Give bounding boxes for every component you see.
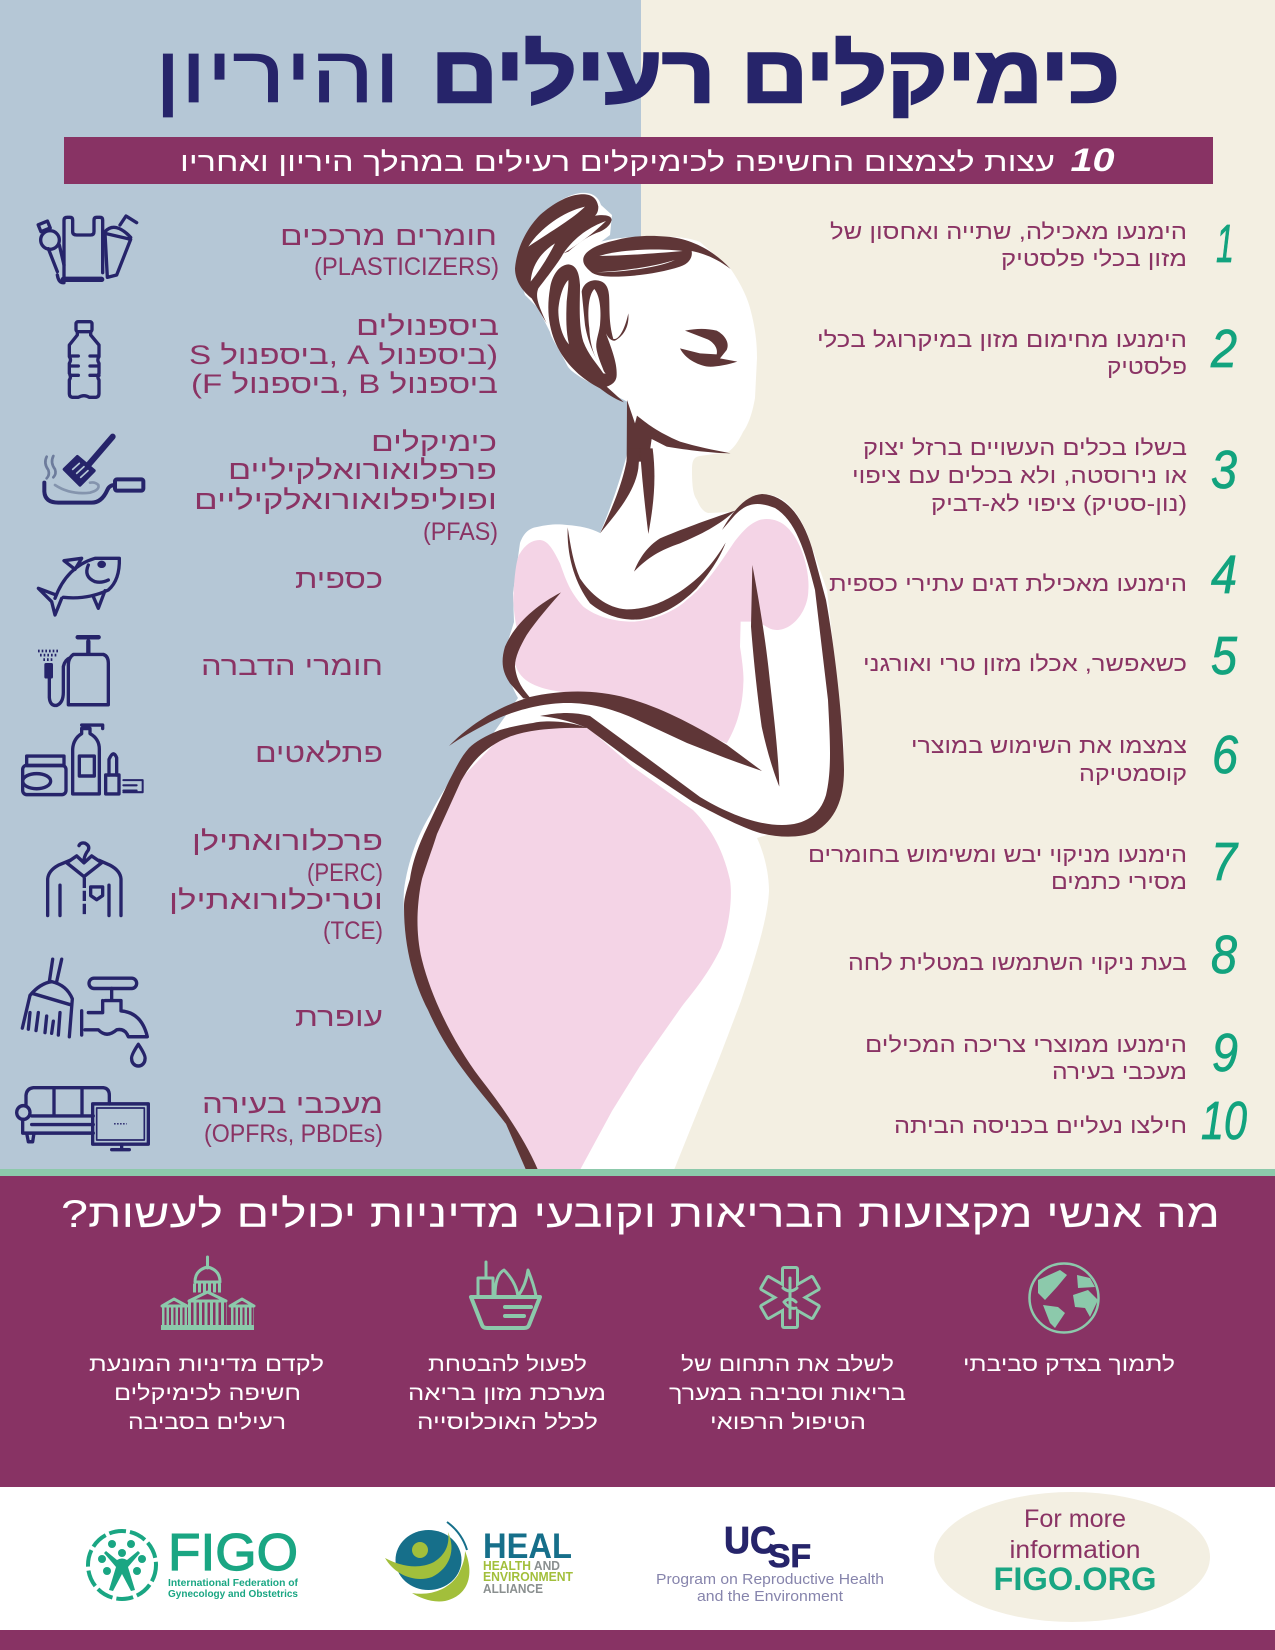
breast stroke bbox=[503, 592, 561, 698]
action: integrate health and environment: הטיפול הרפואי bbox=[710, 1411, 866, 1434]
tip 2: פלסטיק bbox=[1107, 354, 1187, 379]
logo: UCSF program: UC bbox=[724, 1520, 776, 1562]
tip 1: מזון בכלי פלסטיק bbox=[1001, 246, 1187, 271]
tip 3 bbox=[852, 435, 1237, 516]
icon: frying pan and spatula bbox=[44, 437, 143, 503]
tip 7: הימנעו מניקוי יבש ומשימוש בחומרים bbox=[808, 842, 1187, 867]
icon: capitol building bbox=[161, 1257, 254, 1330]
outer arm and elbow stroke bbox=[540, 494, 844, 837]
chemical: pesticides: חומרי הדברה bbox=[201, 651, 383, 681]
action: integrate health and environment: בריאות וסביבה במערך bbox=[669, 1382, 906, 1405]
chemical: PFAS bbox=[194, 427, 498, 546]
icon: broom and faucet bbox=[22, 959, 147, 1066]
chemical: PFAS: (PFAS) bbox=[423, 518, 498, 546]
action: integrate health and environment bbox=[669, 1353, 906, 1434]
action: healthy food system: מערכת מזון בריאה bbox=[408, 1382, 606, 1405]
tip 4: הימנעו מאכילת דגים עתירי כספית bbox=[829, 571, 1187, 596]
chemical: bisphenols: ביספנולים bbox=[356, 311, 499, 341]
action: integrate health and environment: לשלב את התחום של bbox=[681, 1353, 894, 1376]
action: healthy food system: לפעול להבטחת bbox=[428, 1353, 587, 1376]
eye bbox=[680, 329, 737, 367]
icon: water bottle bbox=[69, 322, 99, 397]
inner arm stroke bbox=[751, 565, 779, 787]
tip 3: 3 bbox=[1211, 440, 1237, 500]
section heading: מה אנשי מקצועות הבריאות וקובעי מדיניות יכולים לעשות? bbox=[61, 1193, 1220, 1236]
neck strokes bbox=[600, 448, 640, 533]
tip 6: 6 bbox=[1212, 725, 1239, 785]
collar stroke bbox=[634, 511, 735, 572]
chemical: plasticizers: (PLASTICIZERS) bbox=[314, 253, 499, 281]
tip 10: חילצו נעליים בכניסה הביתה bbox=[894, 1113, 1187, 1138]
icon: plastic bag, bottle and cup bbox=[38, 216, 137, 283]
logo: FIGO: Gynecology and Obstetrics bbox=[168, 1588, 298, 1600]
tip 6: צמצמו את השימוש במוצרי bbox=[911, 733, 1187, 758]
logo: HEAL: ALLIANCE bbox=[483, 1582, 543, 1596]
tip 9: הימנעו ממוצרי צריכה המכילים bbox=[865, 1032, 1187, 1057]
logo: FIGO: FIGO bbox=[168, 1524, 298, 1582]
panel: footer logos bbox=[0, 1487, 1275, 1630]
tip 2: הימנעו מחימום מזון במיקרוגל בכלי bbox=[817, 327, 1187, 352]
tip 4 bbox=[829, 545, 1237, 605]
tip 10 bbox=[894, 1091, 1247, 1151]
chemical: plasticizers: חומרים מרככים bbox=[280, 221, 497, 251]
chemical: phthalates: פתלאטים bbox=[255, 738, 383, 768]
tip 5 bbox=[863, 626, 1238, 686]
panel: chemical icons top bbox=[38, 216, 143, 615]
chemical: PERC and TCE: (TCE) bbox=[323, 917, 383, 945]
chemical: bisphenols bbox=[189, 311, 499, 399]
tip 7 bbox=[808, 832, 1239, 894]
subtitle banner: 10 bbox=[1070, 142, 1115, 178]
green divider bar bbox=[0, 1169, 1275, 1176]
action: prevention policy: רעילים בסביבה bbox=[128, 1411, 286, 1434]
dress pink belly bbox=[410, 727, 731, 1170]
action: healthy food system bbox=[408, 1353, 606, 1434]
tip 10: 10 bbox=[1201, 1091, 1247, 1151]
tip 8: בעת ניקוי השתמשו במטלית לחה bbox=[848, 950, 1187, 975]
chemical: PFAS: ופוליפלואורואלקיליים bbox=[194, 485, 497, 515]
chemical: PERC and TCE: וטריכלורואתילן bbox=[169, 885, 383, 915]
tip 7: 7 bbox=[1211, 832, 1239, 892]
forearm upper stroke bbox=[449, 692, 762, 771]
logo: FIGO: International Federation of bbox=[168, 1577, 298, 1589]
jaw and neck bbox=[627, 400, 731, 462]
logo: UCSF program: SF bbox=[768, 1538, 811, 1574]
callout: for more information: FIGO.ORG bbox=[994, 1561, 1156, 1597]
chemical: lead: עופרת bbox=[295, 1002, 383, 1032]
callout: for more information: For more bbox=[1024, 1505, 1126, 1533]
icon: cosmetics bbox=[23, 725, 143, 795]
tip 8 bbox=[848, 925, 1237, 985]
icon: globe bbox=[1030, 1264, 1098, 1332]
icon: sofa and television bbox=[17, 1088, 148, 1150]
tip 1 bbox=[830, 214, 1234, 274]
callout: for more information bbox=[934, 1492, 1210, 1622]
logo: HEAL: ENVIRONMENT bbox=[483, 1570, 573, 1584]
subtitle banner: עצות לצמצום החשיפה לכימיקלים רעילים במהלך היריון ואחריו bbox=[180, 147, 1055, 177]
tip 2 bbox=[817, 319, 1237, 379]
tip 9 bbox=[865, 1023, 1238, 1084]
tip 2: 2 bbox=[1210, 319, 1237, 379]
chemical: mercury: כספית bbox=[295, 564, 383, 594]
action: healthy food system: לכלל האוכלוסייה bbox=[417, 1411, 598, 1434]
logo: HEAL bbox=[385, 1522, 573, 1601]
logo: HEAL: HEAL bbox=[483, 1527, 572, 1566]
title: כימיקלים רעילים bbox=[431, 30, 1120, 119]
belly stroke bbox=[404, 721, 587, 1170]
tip 1: 1 bbox=[1216, 214, 1234, 274]
tip 7: מסירי כתמים bbox=[1051, 869, 1187, 894]
hair white backing bbox=[516, 193, 612, 310]
logo: HEAL: HEALTH AND bbox=[483, 1559, 560, 1573]
bottom purple strip bbox=[0, 1630, 1275, 1650]
panel: chemical icons bottom bbox=[17, 637, 148, 1150]
tip 6 bbox=[911, 725, 1239, 786]
tip 6: קוסמטיקה bbox=[1079, 761, 1187, 786]
tip 3: (נון-סטיק) ציפוי לא-דביק bbox=[931, 491, 1187, 516]
chemical: PERC and TCE: פרכלורואתילן bbox=[192, 826, 383, 856]
tip 5: כשאפשר, אכלו מזון טרי ואורגני bbox=[863, 651, 1187, 676]
dress pink chest bbox=[513, 519, 809, 743]
tip 9: 9 bbox=[1212, 1023, 1238, 1083]
chemical: PERC and TCE bbox=[169, 826, 383, 945]
icon: star of life bbox=[758, 1266, 822, 1329]
panel: ten tips bbox=[808, 214, 1247, 1151]
action: environmental justice: לתמוך בצדק סביבתי bbox=[963, 1353, 1175, 1376]
white body silhouette bbox=[404, 237, 844, 1170]
logo: UCSF program bbox=[656, 1520, 884, 1605]
neckline bbox=[568, 527, 726, 620]
panel: what professionals can do bbox=[0, 1176, 1275, 1487]
title bbox=[155, 30, 1120, 119]
chemical: plasticizers bbox=[280, 221, 499, 281]
logo: UCSF program: Program on Reproductive Health bbox=[656, 1571, 884, 1588]
chemical: flame retardants: (OPFRs, PBDEs) bbox=[204, 1120, 383, 1148]
hair strokes bbox=[515, 194, 737, 462]
chemical: PFAS: כימיקלים bbox=[371, 427, 497, 457]
chemical: PFAS: פרפלואורואלקיליים bbox=[228, 455, 497, 485]
tip 9: מעכבי בעירה bbox=[1052, 1059, 1187, 1084]
chemical: bisphenols: (ביספנול A ,ביספנול S bbox=[189, 340, 498, 370]
action: prevention policy: לקדם מדיניות המונעת bbox=[89, 1353, 324, 1376]
title: והיריון bbox=[155, 30, 400, 119]
chemical: flame retardants: מעכבי בעירה bbox=[202, 1089, 383, 1119]
icon: fish bbox=[38, 558, 119, 615]
logo: UCSF program: and the Environment bbox=[697, 1588, 844, 1605]
action: prevention policy bbox=[89, 1353, 324, 1434]
icon: food bowl bbox=[471, 1262, 540, 1328]
tip 3: או נירוסטה, ולא בכלים עם ציפוי bbox=[852, 463, 1187, 488]
tip 1: הימנעו מאכילה, שתייה ואחסון של bbox=[830, 219, 1187, 244]
pregnant woman illustration bbox=[404, 193, 844, 1170]
icon: dry cleaned shirt bbox=[48, 843, 121, 915]
panel: chemicals list bbox=[169, 221, 499, 1148]
logo: FIGO bbox=[88, 1524, 298, 1600]
chemical: PERC and TCE: (PERC) bbox=[307, 859, 383, 887]
icon: pesticide sprayer bbox=[38, 637, 108, 705]
subtitle banner bbox=[64, 137, 1213, 184]
tip 8: 8 bbox=[1211, 925, 1237, 985]
tip 5: 5 bbox=[1211, 626, 1238, 686]
chemical: flame retardants bbox=[202, 1089, 383, 1148]
callout: for more information: information bbox=[1010, 1536, 1140, 1564]
tip 4: 4 bbox=[1211, 545, 1237, 605]
tip 3: בשלו בכלים העשויים ברזל יצוק bbox=[863, 435, 1187, 460]
action: prevention policy: חשיפה לכימיקלים bbox=[114, 1382, 301, 1405]
chemical: bisphenols: ביספנול B ,ביספנול F) bbox=[191, 369, 498, 399]
